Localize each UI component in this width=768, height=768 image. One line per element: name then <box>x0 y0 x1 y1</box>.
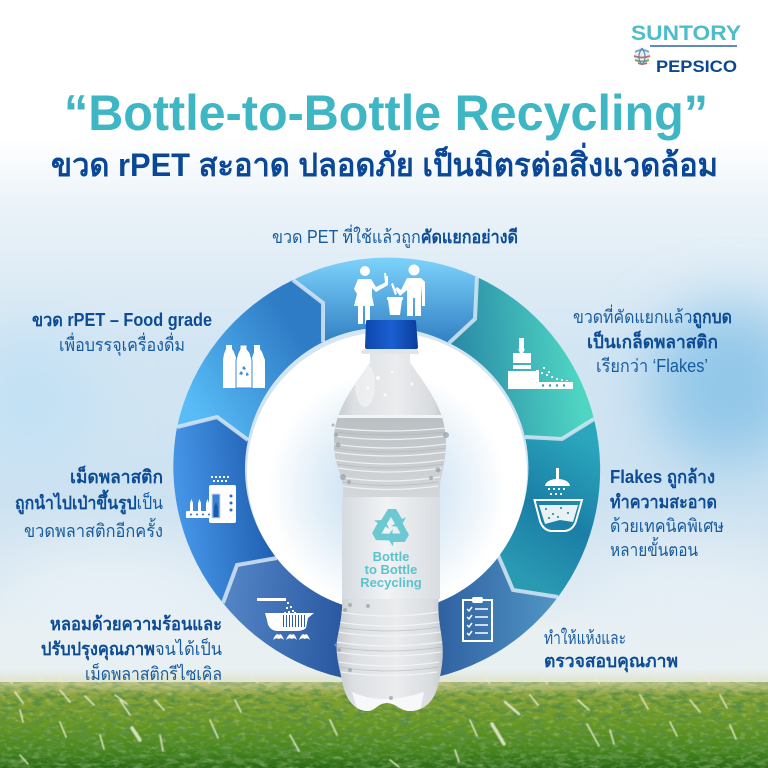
caption: step 6 blow moulding: ขวดพลาสติกอีกครั้ง <box>24 518 163 541</box>
logo: Suntory PepsiCo: PEPSICO <box>656 58 737 76</box>
bottle label <box>342 497 440 599</box>
caption: step 7 food grade <box>32 310 212 356</box>
caption: step 2 flakes: เรียกว่า ‘Flakes’ <box>596 356 708 376</box>
water droplets <box>332 424 449 700</box>
caption: step 7 food grade: เพื่อบรรจุเครื่องดื่ม <box>59 332 185 356</box>
caption: step 2 flakes: ขวดที่คัดแยกแล้วถูกบด <box>573 304 732 329</box>
icon: crushing machine <box>508 338 573 389</box>
caption: step 2 flakes: เป็นเกล็ดพลาสติก <box>587 330 718 352</box>
circular process ring <box>173 258 600 683</box>
caption: step 7 food grade: ขวด rPET – Food grade <box>32 310 212 330</box>
segment: melting <box>223 558 387 683</box>
caption: step 3 washing: ด้วยเทคนิคพิเศษ <box>610 516 724 536</box>
caption: step 4 drying: ตรวจสอบคุณภาพ <box>544 651 678 673</box>
logo: Suntory PepsiCo: SUNTORY <box>631 22 741 45</box>
grass field <box>0 664 768 768</box>
logo: Suntory PepsiCo <box>631 22 741 76</box>
segment: blow moulding <box>173 417 277 603</box>
caption: step 5 melting: หลอมด้วยความร้อนและ <box>50 614 222 634</box>
caption: step 3 washing <box>610 467 724 560</box>
caption: step 5 melting: ปรับปรุงคุณภาพจนได้เป็น <box>41 637 222 661</box>
segment: sorting <box>293 258 477 343</box>
label text: Bottle <box>373 549 409 564</box>
bottle cap <box>365 320 418 349</box>
center white circle <box>247 332 527 612</box>
caption: step 2 flakes <box>573 304 732 376</box>
caption: step 3 washing: หลายขั้นตอน <box>610 537 698 560</box>
icon: clipboard checklist <box>463 597 492 641</box>
icon: melting pellets <box>257 598 314 640</box>
caption: step 6 blow moulding <box>15 465 163 541</box>
caption: step 5 melting: เม็ดพลาสติกรีไซเคิล <box>85 662 222 684</box>
bottle <box>330 320 450 715</box>
caption: step 1 sorted: ขวด PET ที่ใช้แล้วถูกคัดแยกอย่างดี <box>272 224 518 248</box>
caption: step 4 drying: ทำให้แห้งและ <box>544 627 626 648</box>
icon: PepsiCo globe <box>634 48 650 65</box>
segment: food grade bottles <box>177 280 323 440</box>
icon: shower washing flakes <box>534 468 582 531</box>
bottle neck ring <box>361 349 419 354</box>
segment: drying and inspection <box>387 555 558 683</box>
subtitle: ขวด rPET สะอาด ปลอดภัย เป็นมิตรต่อสิ่งแวดล้อม <box>51 142 718 183</box>
bottle body <box>330 350 450 715</box>
caption: step 6 blow moulding: ถูกนำไปเป่าขึ้นรูปเป็น <box>15 489 163 515</box>
caption: step 5 melting <box>41 614 222 684</box>
caption: step 4 drying <box>544 627 678 673</box>
title: “Bottle-to-Bottle Recycling” <box>64 85 708 141</box>
caption: step 3 washing: Flakes ถูกล้าง <box>610 467 715 489</box>
segment: flaking <box>449 277 594 439</box>
icon: blow moulding machine <box>186 476 236 523</box>
icon: people recycling <box>354 264 425 324</box>
icon: recycled bottles <box>223 345 265 388</box>
caption: step 3 washing: ทำความสะอาด <box>610 492 717 512</box>
label text: to Bottle <box>365 562 417 577</box>
caption: step 6 blow moulding: เม็ดพลาสติก <box>70 465 163 487</box>
segment: washing <box>498 419 600 597</box>
label text: Recycling <box>360 575 422 590</box>
icon: recycle symbol <box>367 509 413 550</box>
label text <box>360 549 422 590</box>
